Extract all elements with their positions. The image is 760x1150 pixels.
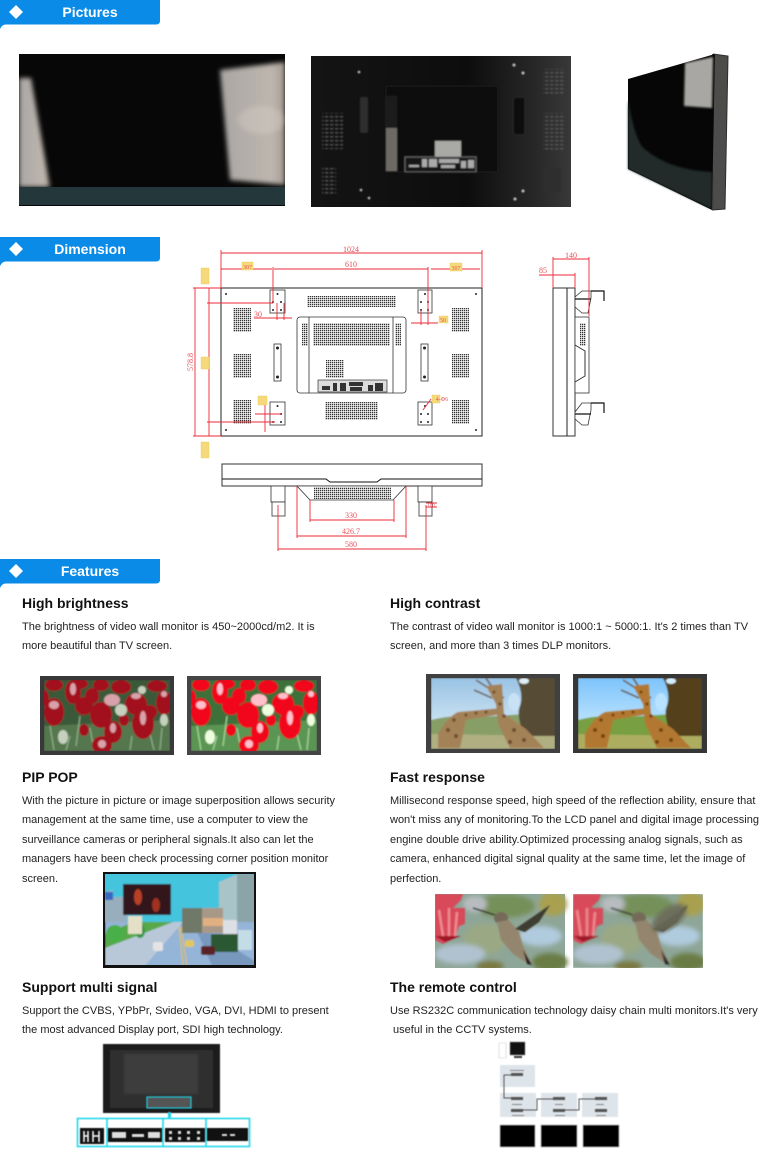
- text: fast response description: Millisecond response speed, high speed of the reflection ability, ensure that won't miss any of monitoring.To the LCD panel and digital image processing engine double drive ability.Optimized processing analog signals, such as camera, enhanced digital signal quality at the same time, let the image of perfection.: [390, 795, 759, 885]
- image: monitor rear with highlighted ports: [76, 1043, 252, 1148]
- heading: Fast response: Fast response: [390, 769, 485, 785]
- side view: 85: [539, 266, 547, 275]
- section header: Pictures: [0, 0, 160, 29]
- section header: Dimension: Dimension: [54, 241, 126, 257]
- text: contrast description: The contrast of video wall monitor is 1000:1 ~ 5000:1. It's 2 times than TV screen, and more than 3 times DLP monitors.: [390, 621, 748, 652]
- text: PIP POP description: With the picture in picture or image superposition allows security management at the same time, use a computer to view the surveillance cameras or peripheral signals.It also can let the managers have been check processing corner position monitor screen.: [22, 795, 335, 885]
- rear view dimension lines: 1024: [343, 245, 359, 254]
- bottom view: 426.7: [342, 527, 360, 536]
- images: tulip comparison: [40, 676, 321, 755]
- section header: Pictures: Pictures: [62, 4, 118, 20]
- rear view: [221, 288, 482, 436]
- bottom view: 330: [345, 511, 357, 520]
- heading: High contrast: High contrast: [390, 595, 480, 611]
- rear view dimension lines: 50: [440, 318, 446, 324]
- photo: monitor back: [311, 56, 571, 207]
- text: remote control description: Use RS232C communication technology daisy chain multi monitors.It's very useful in the CCTV systems.: [390, 1005, 758, 1036]
- section header: Features: Features: [61, 563, 119, 579]
- side view: 140: [565, 251, 577, 260]
- bottom view: 580: [345, 540, 357, 549]
- images: hummingbird comparison: [435, 894, 703, 968]
- photo: monitor front: [19, 54, 285, 206]
- diagram: RS232C daisy chain: [498, 1041, 620, 1148]
- bottom view: 100: [427, 504, 435, 509]
- text: brightness description: The brightness of video wall monitor is 450~2000cd/m2. It is more beautiful than TV screen.: [22, 621, 315, 652]
- photo: monitor angled: [626, 54, 728, 210]
- rear view dimension lines: [186, 245, 482, 458]
- bottom view: [222, 464, 482, 551]
- heading: The remote control: The remote control: [390, 979, 517, 995]
- rear view dimension lines: 578.8: [186, 353, 195, 371]
- rear view dimension lines: 307: [243, 265, 252, 271]
- section header: Features: [0, 559, 160, 588]
- rear view dimension lines: 610: [345, 260, 357, 269]
- text: multi signal description: Support the CVBS, YPbPr, Svideo, VGA, DVI, HDMI to present the most advanced Display port, SDI high technology.: [22, 1005, 329, 1036]
- side view: [539, 251, 604, 436]
- heading: High brightness: High brightness: [22, 595, 129, 611]
- rear view dimension lines: 30: [254, 310, 262, 319]
- heading: PIP POP: PIP POP: [22, 769, 78, 785]
- image: picture in picture street scene: [103, 872, 256, 968]
- heading: Support multi signal: Support multi signal: [22, 979, 157, 995]
- section header: Dimension: [0, 237, 160, 266]
- dimension drawing: rear view, bottom view and side view: [186, 245, 605, 551]
- images: giraffe comparison: [426, 674, 707, 753]
- rear view dimension lines: 4-Φ6: [436, 397, 448, 403]
- rear view dimension lines: 307: [452, 266, 460, 272]
